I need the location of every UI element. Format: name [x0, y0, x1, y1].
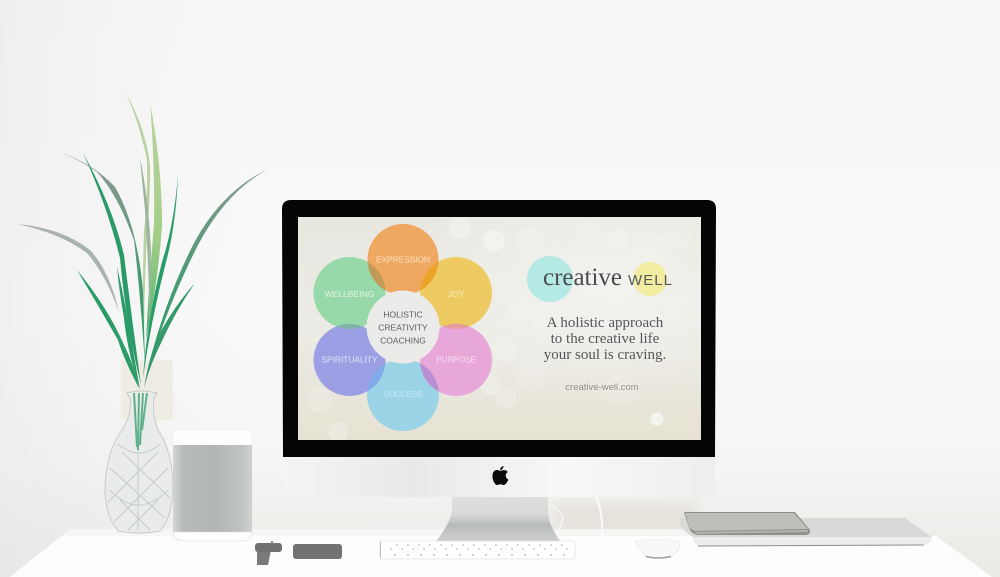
petal: wellbeing: WELLBEING: [324, 289, 374, 299]
petal: expression: [368, 224, 438, 295]
petal: joy: JOY: [448, 289, 465, 299]
icon: apple logo: [492, 466, 508, 485]
center circle: CREATIVITY: [378, 322, 428, 332]
chin: [283, 457, 715, 497]
vase: [105, 391, 173, 533]
laptop: [679, 518, 932, 546]
logo: creative well: creative: [543, 264, 622, 291]
logo: creative well: [527, 256, 672, 302]
desk: [10, 529, 992, 577]
website url: creative-well.com: [565, 382, 639, 393]
mouse: [635, 540, 680, 558]
petal: success: SUCCESS: [384, 389, 423, 399]
bokeh background: [328, 220, 664, 440]
petal: purpose: PURPOSE: [436, 354, 476, 364]
bezel: [282, 200, 716, 457]
watch: [255, 541, 282, 565]
center circle: [366, 290, 440, 364]
logo: creative well: WELL: [628, 272, 672, 289]
petal overlaps: [336, 262, 469, 392]
keyboard: [380, 541, 575, 559]
monitor stand: [435, 497, 602, 542]
petal: spirituality: SPIRITUALITY: [322, 354, 378, 364]
phone: [293, 544, 342, 559]
petal: success: [367, 359, 439, 431]
center circle: COACHING: [380, 336, 426, 346]
tagline: A holistic approach: [547, 315, 664, 331]
plant in glass vase: [17, 93, 268, 533]
screen: [298, 217, 701, 442]
tagline: your soul is craving.: [544, 347, 666, 363]
petal: purpose: [420, 324, 492, 396]
tagline: to the creative life: [551, 331, 660, 347]
petal: spirituality: [314, 324, 386, 396]
leaves: [17, 93, 268, 390]
petal: joy: [420, 257, 492, 329]
petal: wellbeing: [314, 257, 386, 329]
diagram: holistic creativity flower: [314, 224, 492, 431]
tablet: [684, 512, 810, 535]
petal: expression: EXPRESSION: [376, 254, 430, 264]
center circle: HOLISTIC: [383, 310, 423, 320]
wall outlet plate: [121, 360, 173, 420]
monitor: [282, 200, 716, 497]
speaker: [173, 430, 252, 541]
